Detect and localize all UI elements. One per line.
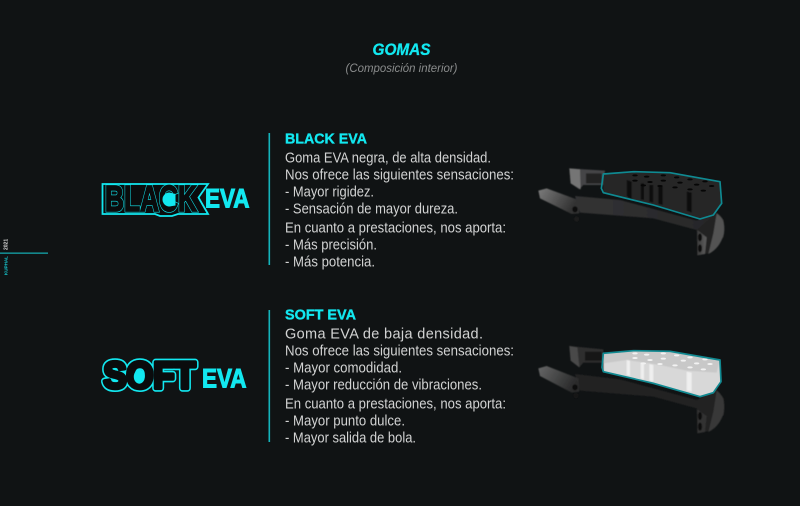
- divider: soft eva: [268, 310, 270, 442]
- logo: SOFT EVA: SOFT: [104, 355, 196, 396]
- divider: black eva: [268, 133, 270, 265]
- text block: black eva: - Sensación de mayor dureza.: [285, 202, 458, 218]
- text block: soft eva: - Mayor punto dulce.: [285, 414, 405, 430]
- logo: SOFT EVA: SOFT: [104, 355, 196, 396]
- racket section: soft eva: [538, 346, 724, 433]
- text block: soft eva: SOFT EVA: [285, 308, 357, 324]
- side label: 2021: [4, 239, 10, 250]
- side label: [0, 239, 48, 275]
- text block: soft eva: - Mayor comodidad.: [285, 361, 402, 377]
- foam outline: [602, 351, 721, 397]
- foam outline: [601, 172, 722, 219]
- text block: soft eva: - Mayor reducción de vibraciones.: [285, 378, 482, 394]
- text block: black eva: En cuanto a prestaciones, nos aporta:: [285, 220, 506, 236]
- racket section: black eva: [538, 168, 724, 255]
- text block: soft eva: Goma EVA de baja densidad.: [285, 326, 483, 342]
- text block: soft eva: En cuanto a prestaciones, nos aporta:: [285, 396, 506, 412]
- logo: BLACK EVA: BLACK: [105, 178, 197, 219]
- text block: black eva: Goma EVA negra, de alta densidad.: [285, 150, 491, 166]
- text block: black eva: - Más potencia.: [285, 255, 375, 271]
- text block: black eva: Nos ofrece las siguientes sensaciones:: [285, 168, 514, 184]
- text block: black eva: - Más precisión.: [285, 238, 377, 254]
- logo: SOFT EVA: EVA: [202, 364, 246, 394]
- text block: soft eva: Nos ofrece las siguientes sensaciones:: [285, 344, 514, 360]
- foam holes: [632, 174, 714, 192]
- text block: black eva: [285, 132, 514, 271]
- text block: soft eva: [285, 308, 514, 447]
- side label: KUPHAL: [4, 256, 8, 275]
- subtitle: (Composición interior): [346, 61, 458, 75]
- text block: soft eva: - Mayor salida de bola.: [285, 431, 416, 447]
- foam holes: [632, 352, 713, 370]
- text block: black eva: BLACK EVA: [285, 132, 368, 148]
- logo: SOFT EVA: [104, 355, 246, 396]
- title: GOMAS: [372, 41, 430, 59]
- logo: BLACK EVA: BLACK: [105, 178, 197, 219]
- text block: black eva: - Mayor rigidez.: [285, 185, 374, 201]
- logo: BLACK EVA: EVA: [205, 184, 250, 214]
